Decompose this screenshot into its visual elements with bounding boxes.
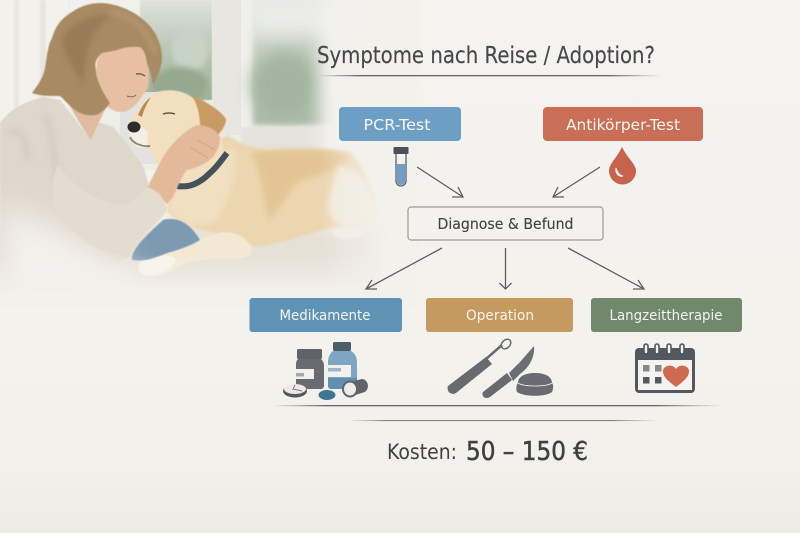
arrow: PCR to diagnosis (417, 167, 463, 197)
photo fades (0, 258, 346, 294)
jeans (132, 219, 200, 261)
box: PCR-Test (339, 107, 461, 141)
arrow: to Medikamente (366, 248, 442, 289)
icon: surgical instruments and bowl (448, 337, 553, 398)
title: Symptome nach Reise / Adoption? (317, 43, 655, 69)
box: Medikamente (250, 298, 402, 332)
woman: hair (32, 3, 162, 115)
arrow: to Langzeittherapie (568, 248, 644, 289)
box: Medikamente: Medikamente (280, 308, 371, 324)
dog body (138, 135, 377, 276)
woman: sleeve (52, 165, 167, 254)
woman: face (96, 44, 149, 112)
window and curtains backdrop (14, 0, 330, 164)
icon: medicine bottles and pills (283, 342, 368, 400)
box: Langzeittherapie: Langzeittherapie (610, 308, 723, 324)
icon: blood drop (609, 147, 636, 184)
box: Operation: Operation (466, 308, 534, 324)
bed surface (116, 222, 366, 280)
sweater fade (0, 202, 142, 285)
box: Diagnose & Befund (408, 207, 603, 240)
woman: neck (68, 104, 106, 140)
photo: woman cuddling dog by a window (0, 0, 376, 282)
divider lines (271, 405, 723, 421)
cost line (387, 437, 588, 467)
woman: forearm and hand (147, 125, 220, 204)
icon: calendar with heart (635, 344, 695, 393)
dog head (128, 90, 227, 186)
cost line: Kosten: (387, 440, 457, 464)
arrow: to Operation (500, 248, 512, 289)
box: Antikörper-Test (543, 107, 703, 141)
arrow: antibody to diagnosis (553, 167, 600, 197)
box: Operation (426, 298, 573, 332)
box: Antikörper-Test: Antikörper-Test (566, 116, 680, 134)
box: PCR-Test: PCR-Test (364, 116, 430, 134)
woman: sweater body (0, 97, 148, 278)
box: Diagnose & Befund: Diagnose & Befund (438, 215, 574, 233)
cost line: 50 – 150 € (466, 437, 588, 467)
dog collar (177, 153, 227, 186)
box: Langzeittherapie (591, 298, 742, 332)
icon: test tube (394, 147, 408, 186)
